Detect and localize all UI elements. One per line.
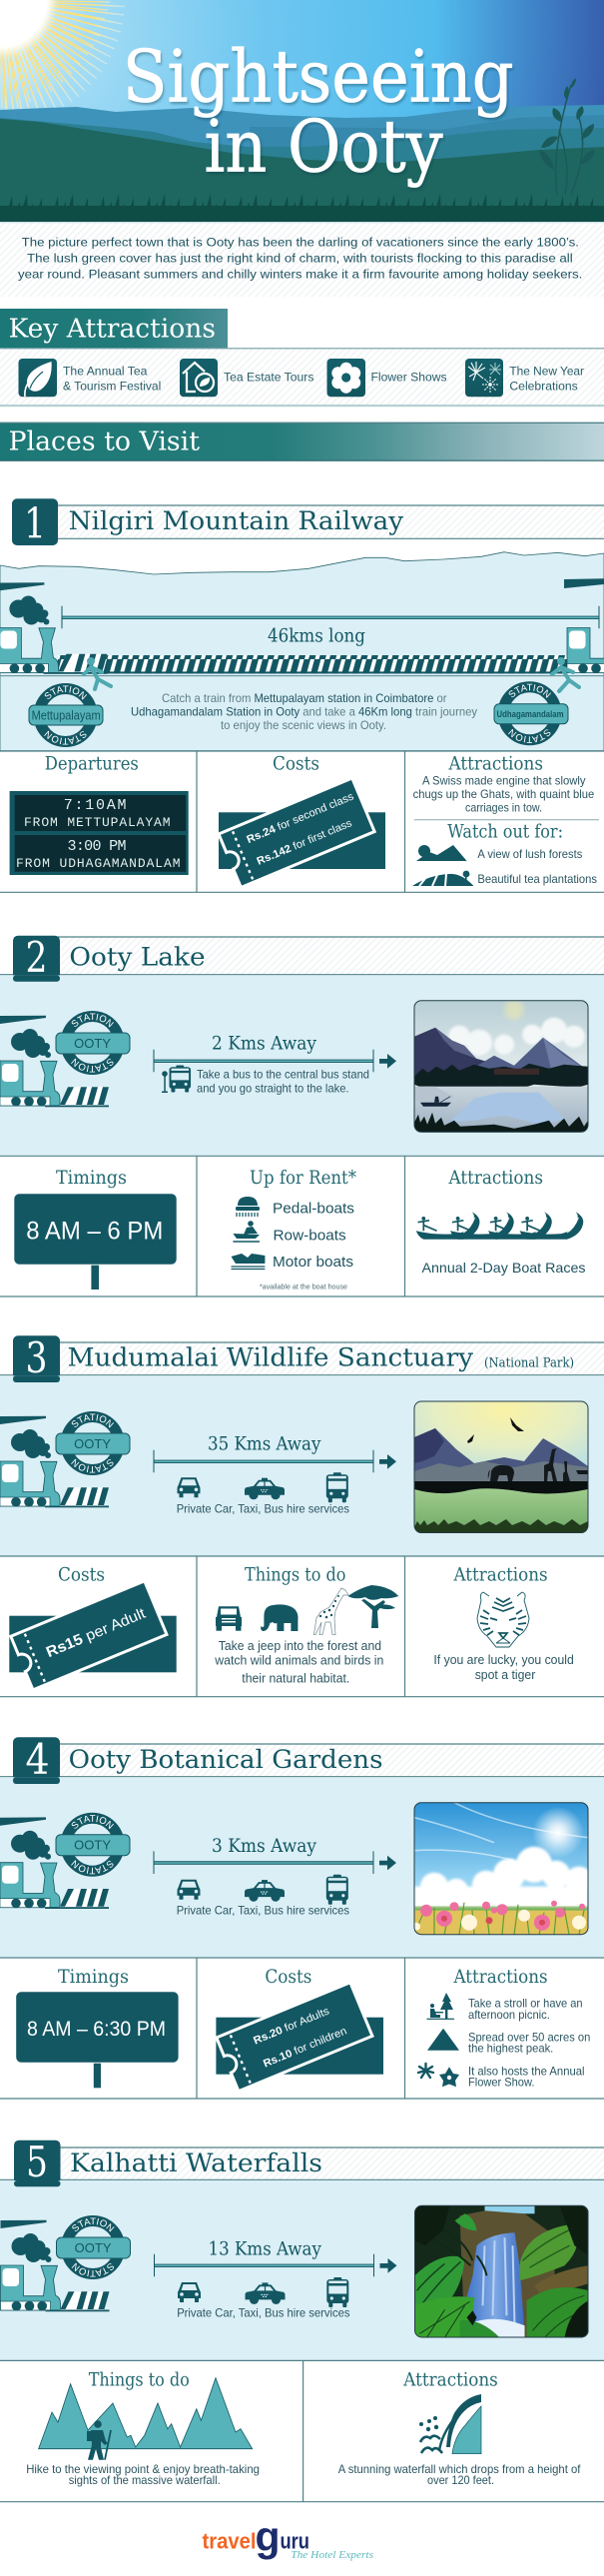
icon: hiker: [87, 2420, 111, 2460]
text: things to do: watch wild animals and birds in: [214, 1653, 383, 1668]
label: new year: The New Year: [509, 364, 584, 378]
panel: up for rent: Pedal-boats: [273, 1201, 354, 1217]
icon: tea estate house: [180, 359, 218, 397]
station: udhagamandalam: STATION: [509, 683, 551, 698]
icon: flowers: [418, 2064, 459, 2087]
panel: timings: [14, 1167, 177, 1289]
label: festival: [63, 364, 161, 394]
panel: attractions: [418, 1966, 590, 2090]
icon: forest hills: [416, 845, 467, 861]
station: ooty: STATION: [71, 1458, 114, 1472]
icon: mountain: [427, 2029, 459, 2051]
text: things to do: their natural habitat.: [242, 1670, 349, 1685]
panel: attractions: chugs up the Ghats, with quaint blue: [413, 788, 594, 801]
panel: departures: 7:10AM: [64, 797, 126, 814]
panel: things to do: Things to do: [89, 2368, 190, 2390]
station: ooty: OOTY: [74, 1036, 111, 1051]
panel: railway route: [0, 552, 604, 751]
station: mettupalayam: STATION: [44, 731, 86, 745]
icon: flower: [327, 359, 365, 397]
label: 2 kms away: 2 Kms Away: [212, 1033, 316, 1055]
label: festival: The Annual Tea: [63, 364, 148, 378]
text: flower show: [468, 2065, 585, 2090]
text: acres: [468, 2032, 590, 2056]
label: flower shows: Flower Shows: [371, 371, 447, 385]
panel: attractions: Attractions: [453, 1966, 548, 1988]
icon: waterfall: [419, 2394, 481, 2454]
icon: mountains: [39, 2378, 253, 2449]
title: [123, 35, 515, 191]
icon: elephant: [261, 1604, 299, 1631]
heading: botanical gardens: 4: [26, 1735, 50, 1784]
station: udhagamandalam: Udhagamandalam: [497, 709, 563, 720]
grass: [0, 192, 604, 222]
icon: tea plantation: [412, 871, 473, 886]
panel: timings: Timings: [56, 1167, 127, 1189]
icon: plant silhouette: [539, 78, 595, 195]
station: mettupalayam: STATION: [44, 685, 87, 699]
heading: kalhatti waterfalls: Kalhatti Waterfalls: [70, 2148, 322, 2177]
station: udhagamandalam: STATION: [508, 729, 551, 743]
heading: key attractions: [0, 309, 228, 349]
panel: things to do: Things to do: [245, 1564, 345, 1586]
station: ooty: [56, 1411, 130, 1475]
label: tea estate tours: Tea Estate Tours: [224, 371, 313, 385]
panel: departures: FROM METTUPALAYAM: [24, 815, 170, 830]
panel: costs: [219, 753, 385, 888]
section 5: kalhatti waterfalls: [0, 2138, 604, 2503]
logo: travelguru: The Hotel Experts: [291, 2550, 373, 2561]
panel: mudumalai route: [0, 1375, 604, 1556]
logo: travelguru: travel: [202, 2529, 256, 2554]
photo: flower meadow: [412, 1803, 593, 1935]
text: tiger: If you are lucky, you could: [433, 1652, 574, 1667]
logo: travelguru: [202, 2513, 373, 2561]
distance line: [154, 2254, 373, 2276]
panel: costs: Rs15 per Adult: [44, 1604, 149, 1661]
panel: botanical route: [0, 1777, 604, 1958]
section 4: ooty botanical gardens: [0, 1735, 604, 2100]
label: 13 kms away: 13 Kms Away: [208, 2237, 321, 2259]
panel: attractions: Watch out for:: [447, 820, 563, 842]
panel: costs: Costs: [58, 1564, 105, 1586]
hero banner: [0, 0, 604, 222]
text: transport: Private Car, Taxi, Bus hire services: [177, 2306, 350, 2320]
panel: costs: Costs: [265, 1966, 311, 1988]
panel: attractions: [433, 1564, 574, 1682]
heading: ooty lake: Ooty Lake: [69, 943, 206, 972]
text: how to catch the train: Udhagamandalam Station in Ooty and take a 46Km long train journey: [131, 704, 477, 718]
icon: snake boats: [416, 1212, 583, 1240]
icon: bus stop: [162, 1065, 191, 1093]
station: ooty: STATION: [72, 2217, 114, 2231]
panel: attractions: Annual 2-Day Boat Races: [421, 1260, 585, 1276]
panel: costs: [216, 1966, 383, 2092]
text: transport: Private Car, Taxi, Bus hire services: [177, 1903, 349, 1917]
text: bus directions: and you go straight to the lake.: [197, 1081, 349, 1095]
heading: mudumalai: Mudumalai Wildlife Sanctuary: [68, 1342, 474, 1371]
text: things to do: Take a jeep into the forest and: [219, 1638, 381, 1653]
station: ooty: STATION: [72, 1013, 114, 1027]
heading: ooty lake: [0, 933, 604, 982]
text: acres: Spread over 50 acres on: [468, 2032, 590, 2045]
panel: departures: Departures: [45, 753, 139, 775]
icon: train: [0, 1817, 109, 1909]
icon: bus: [326, 1472, 348, 1502]
text: flower show: Flower Show.: [468, 2077, 534, 2090]
heading: places to visit: Places to Visit: [8, 428, 201, 457]
text: hike: Hike to the viewing point & enjoy breath-taking: [26, 2462, 260, 2476]
station: ooty: OOTY: [74, 1436, 111, 1451]
icon: running person right: [552, 657, 579, 691]
icon: train: [0, 1016, 109, 1107]
heading: nilgiri mountain railway: [12, 498, 604, 547]
text: hike: sights of the massive waterfall.: [69, 2473, 221, 2487]
text: tiger: [433, 1652, 574, 1682]
station: ooty: STATION: [72, 2263, 114, 2277]
station: mettupalayam: Mettupalayam: [32, 709, 101, 723]
icon: taxi: [245, 1880, 285, 1902]
heading: mudumalai: (National Park): [484, 1355, 574, 1370]
intro text panel: year round. Pleasant summers and chilly winters make it a firm favourite among holiday seekers.: [18, 268, 582, 282]
station: ooty: STATION: [72, 1414, 114, 1428]
text: transport: Private Car, Taxi, Bus hire services: [177, 1501, 349, 1515]
panel: timings: Timings: [58, 1966, 129, 1988]
text: bus directions: [197, 1068, 369, 1095]
label: new year: [509, 364, 584, 394]
panel: attractions: A Swiss made engine that slowly: [422, 774, 586, 787]
text: waterfall height: A stunning waterfall which drops from a height of: [338, 2462, 581, 2476]
text: things to do: [214, 1638, 383, 1685]
text: hike: [26, 2462, 260, 2487]
rail line: [0, 675, 604, 676]
icon: pedal boat: [236, 1197, 260, 1216]
station: ooty: STATION: [72, 1815, 114, 1830]
info row lines: [0, 1958, 604, 2099]
info row lines: [0, 1156, 604, 1296]
panel: timings: 8 AM – 6:30 PM: [27, 2017, 166, 2041]
icon: sun rays: [0, 0, 125, 125]
distance line: [154, 1851, 373, 1874]
panel: attractions: carriages in tow.: [465, 801, 542, 814]
panel: costs: Rs.142 for first class: [256, 817, 354, 868]
icon: motor boat: [232, 1254, 265, 1269]
intro text panel: The lush green cover has just the right kind of charm, with tourists flocking to this paradise all: [27, 252, 573, 266]
panel: up for rent: Row-boats: [274, 1227, 346, 1244]
heading: nilgiri mountain railway: 1: [24, 499, 46, 547]
icon: picnic under tree: [427, 1993, 454, 2020]
icon: bus: [326, 1875, 348, 1905]
icon: left train: [0, 582, 107, 674]
heading: mudumalai: 3: [26, 1333, 48, 1382]
icon: taxi: [245, 1478, 285, 1499]
note: *available at the boat house: [260, 1282, 347, 1290]
icon: train: [0, 1416, 109, 1507]
panel: attractions: Attractions: [448, 1167, 543, 1189]
intro text panel: The picture perfect town that is Ooty has been the darling of vacationers since the early 1800’s.: [22, 236, 579, 250]
panel: up for rent: [232, 1167, 356, 1290]
station: ooty: [56, 1011, 130, 1075]
panel: attractions: Beautiful tea plantations: [477, 873, 597, 886]
panel: up for rent: Motor boats: [273, 1254, 353, 1271]
photo: waterfall: [415, 2205, 589, 2337]
panel: costs: Rs.24 for second class: [245, 790, 356, 846]
label: 46kms long: 46kms long: [268, 624, 365, 646]
track: [58, 655, 567, 673]
heading: mudumalai: [0, 1333, 604, 1382]
station: ooty: [56, 1812, 130, 1877]
title: Sightseeing: [123, 35, 514, 119]
photo: wildlife: [414, 1401, 588, 1533]
text: how to catch the train: [131, 691, 477, 732]
label: festival: & Tourism Festival: [63, 380, 161, 394]
section 3: mudumalai wildlife sanctuary: [0, 1333, 604, 1698]
label: 3 kms away: 3 Kms Away: [212, 1835, 316, 1857]
icon: tiger: [477, 1592, 529, 1647]
panel: timings: [16, 1966, 179, 2088]
icon: taxi: [246, 2282, 286, 2304]
heading: kalhatti waterfalls: [0, 2138, 604, 2186]
text: stroll: afternoon picnic.: [468, 2009, 550, 2022]
panel: lake route: [0, 975, 604, 1155]
panel: costs: Costs: [273, 753, 319, 775]
panel: attractions: Attractions: [453, 1564, 548, 1586]
station: ooty: OOTY: [75, 2240, 112, 2255]
icon: right train: [564, 578, 604, 673]
panel: key attractions: [0, 348, 604, 407]
icon: row boat: [233, 1221, 260, 1242]
panel: departures: [10, 753, 189, 875]
station: ooty: STATION: [71, 1860, 114, 1874]
logo: travelguru: uru: [280, 2529, 309, 2554]
icon: fireworks: [465, 359, 503, 397]
label: 35 kms away: 35 Kms Away: [208, 1433, 321, 1455]
text: tiger: spot a tiger: [475, 1667, 536, 1682]
text: stroll: [468, 1998, 583, 2022]
icon: tea leaf: [18, 359, 57, 397]
heading: ooty lake: 2: [26, 933, 48, 982]
text: how to catch the train: Catch a train from Mettupalayam station in Coimbatore or: [162, 691, 447, 705]
panel: up for rent: Up for Rent*: [250, 1167, 356, 1189]
heading: key attractions: Key Attractions: [8, 314, 216, 344]
info row lines: [0, 1556, 604, 1697]
icon: car: [178, 2282, 201, 2302]
icon: acacia tree: [347, 1585, 398, 1628]
arrow: [379, 1054, 396, 1069]
icon: car: [178, 1477, 200, 1497]
text: how to catch the train: to enjoy the scenic views in Ooty.: [221, 718, 386, 732]
heading: nilgiri mountain railway: Nilgiri Mountain Railway: [69, 506, 404, 535]
panel: departures: 3:00 PM: [68, 838, 126, 855]
icon: jeep: [216, 1606, 242, 1631]
distance line: [154, 1450, 373, 1472]
icon: running person left: [84, 657, 111, 689]
panel: things to do: [214, 1564, 398, 1685]
heading: botanical gardens: Ooty Botanical Gardens: [69, 1745, 382, 1774]
panel: attractions: [412, 753, 599, 886]
panel: costs: [9, 1564, 177, 1690]
station: ooty: [56, 2215, 131, 2279]
panel: attractions: [338, 2368, 581, 2487]
section 1: nilgiri mountain railway: [0, 498, 604, 893]
panel: attractions: Attractions: [448, 753, 543, 775]
photo: lake: [414, 1000, 588, 1133]
info row lines: [0, 751, 604, 892]
station: ooty: OOTY: [74, 1838, 111, 1853]
arrow: [379, 2258, 397, 2273]
panel: attractions: [416, 1167, 585, 1276]
title: in Ooty: [204, 105, 443, 189]
station: mettupalayam: [28, 683, 104, 747]
panel: timings: 8 AM – 6 PM: [26, 1217, 163, 1245]
panel: costs: Rs.20 for Adults: [252, 2005, 331, 2047]
arrow: [379, 1454, 396, 1469]
title: in Ooty: [206, 107, 444, 191]
text: acres: the highest peak.: [468, 2043, 553, 2056]
text: waterfall height: [338, 2462, 581, 2487]
label: new year: Celebrations: [509, 380, 578, 394]
icon: car: [178, 1880, 200, 1900]
distance line: [62, 606, 599, 628]
text: flower show: It also hosts the Annual: [468, 2065, 585, 2078]
intro text panel: [0, 222, 604, 297]
icon: giraffe: [313, 1588, 348, 1635]
panel: things to do: [26, 2368, 260, 2487]
section 2: ooty lake: [0, 933, 604, 1297]
text: stroll: Take a stroll or have an: [468, 1998, 583, 2011]
heading: places to visit: [0, 423, 604, 461]
mountain layers: [0, 105, 604, 222]
panel: waterfalls route: [0, 2180, 604, 2360]
panel: departures: FROM UDHAGAMANDALAM: [16, 856, 180, 871]
icon: train: [0, 2220, 110, 2311]
icon: bus: [326, 2277, 348, 2307]
heading: kalhatti waterfalls: 5: [26, 2138, 48, 2186]
station: udhagamandalam: [493, 681, 569, 745]
logo: travelguru: g: [256, 2513, 280, 2560]
title: Sightseeing: [124, 37, 515, 121]
distance line: [154, 1050, 373, 1072]
text: waterfall height: over 120 feet.: [427, 2473, 494, 2487]
panel: attractions: A view of lush forests: [477, 848, 582, 861]
info row lines: [0, 2360, 604, 2502]
heading: botanical gardens: [0, 1735, 604, 1784]
text: bus directions: Take a bus to the central bus stand: [197, 1068, 369, 1082]
station: ooty: STATION: [71, 1059, 114, 1073]
panel: attractions: Attractions: [402, 2368, 498, 2390]
panel: costs: Rs.10 for children: [262, 2025, 348, 2070]
arrow: [379, 1856, 396, 1870]
